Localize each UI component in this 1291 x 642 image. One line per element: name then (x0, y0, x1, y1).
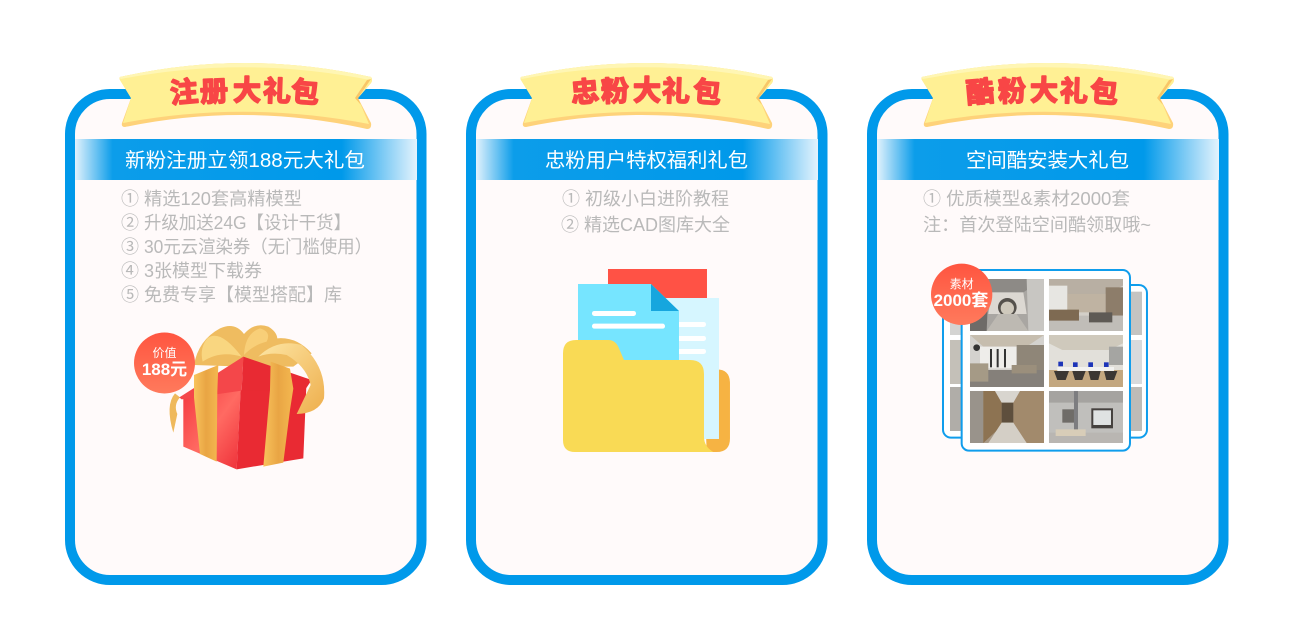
benefits list (121, 185, 372, 307)
front frame (962, 270, 1130, 451)
ribbon title: 册 (199, 76, 229, 107)
ribbon title: 礼 (661, 76, 691, 107)
ribbon title: 礼 (262, 76, 292, 107)
benefits list: 注：首次登陆空间酷领取哦~ (923, 215, 1151, 235)
interior photo 1: hall (970, 279, 1044, 331)
ribbon title: 包 (1089, 76, 1119, 109)
subtitle bar: 新粉注册立领188元大礼包 (125, 149, 365, 172)
benefits list: ① (121, 185, 139, 211)
benefits list: 3张模型下载券 (144, 261, 262, 281)
benefits list: 30元云渲染券（无门槛使用） (144, 237, 372, 257)
benefits list: ② (121, 209, 139, 235)
ribbon title: 大 (1030, 75, 1058, 106)
benefits list: ① (562, 185, 580, 211)
ribbon title: 包 (692, 76, 722, 109)
card frame (872, 94, 1224, 580)
badge: 2000 materials: 2000套 (934, 290, 988, 310)
panel: loyal fans gift pack (471, 63, 822, 580)
interior photo 4: office (1049, 335, 1123, 387)
badge: 2000 materials: 素材 (950, 277, 974, 291)
back frame (943, 285, 1147, 438)
ribbon title: 粉 (997, 76, 1027, 107)
benefits list: 免费专享【模型搭配】库 (144, 285, 342, 305)
benefits list: ② (561, 211, 579, 237)
card frame (471, 94, 822, 580)
panel: register gift pack (70, 63, 422, 580)
ribbon title (169, 75, 320, 109)
ribbon title (965, 75, 1119, 109)
ribbon title: 包 (290, 76, 320, 109)
benefits list (561, 185, 730, 237)
benefits list: ⑤ (121, 281, 139, 307)
panel: kujiale gift pack (872, 63, 1224, 580)
icon: folder with documents (563, 269, 730, 452)
card frame (70, 94, 422, 580)
subtitle bar: 空间酷安装大礼包 (966, 149, 1129, 172)
ribbon title: 酷 (965, 76, 995, 109)
subtitle bar (877, 139, 1219, 180)
benefits list: ③ (121, 233, 139, 259)
benefits list: 精选CAD图库大全 (584, 215, 730, 235)
ribbon title (570, 75, 722, 109)
interior photo 2: lounge (1049, 279, 1123, 331)
ribbon title: 注 (169, 76, 199, 109)
badge: value 188: 188元 (142, 360, 187, 379)
badge: value 188 (134, 332, 195, 394)
subtitle bar: 忠粉用户特权福利礼包 (545, 149, 748, 172)
ribbon title: 大 (633, 75, 661, 106)
subtitle bar (476, 139, 818, 180)
ribbon title: 礼 (1059, 76, 1089, 107)
header ribbon (120, 63, 372, 129)
benefits list (923, 185, 1151, 235)
ribbon title: 粉 (600, 76, 630, 107)
badge: 2000 materials (931, 264, 992, 325)
benefits list: 精选120套高精模型 (144, 189, 302, 209)
header ribbon (520, 63, 773, 129)
image collage of interior renders (931, 264, 1147, 451)
ribbon title: 忠 (570, 76, 600, 109)
benefits list: ① (923, 185, 941, 211)
badge: value 188: 价值 (152, 345, 177, 360)
ribbon title: 大 (233, 75, 261, 106)
header ribbon (922, 63, 1174, 129)
interior photo 3: reception (970, 335, 1044, 387)
benefits list: 升级加送24G【设计干货】 (144, 213, 351, 233)
interior photo 5: corridor (970, 391, 1044, 443)
benefits list: 初级小白进阶教程 (585, 189, 729, 209)
benefits list: 优质模型&素材2000套 (946, 189, 1130, 209)
subtitle bar (75, 139, 417, 180)
icon: gift box (170, 325, 324, 469)
benefits list: ④ (121, 257, 139, 283)
interior photo 6: loft (1049, 391, 1123, 443)
